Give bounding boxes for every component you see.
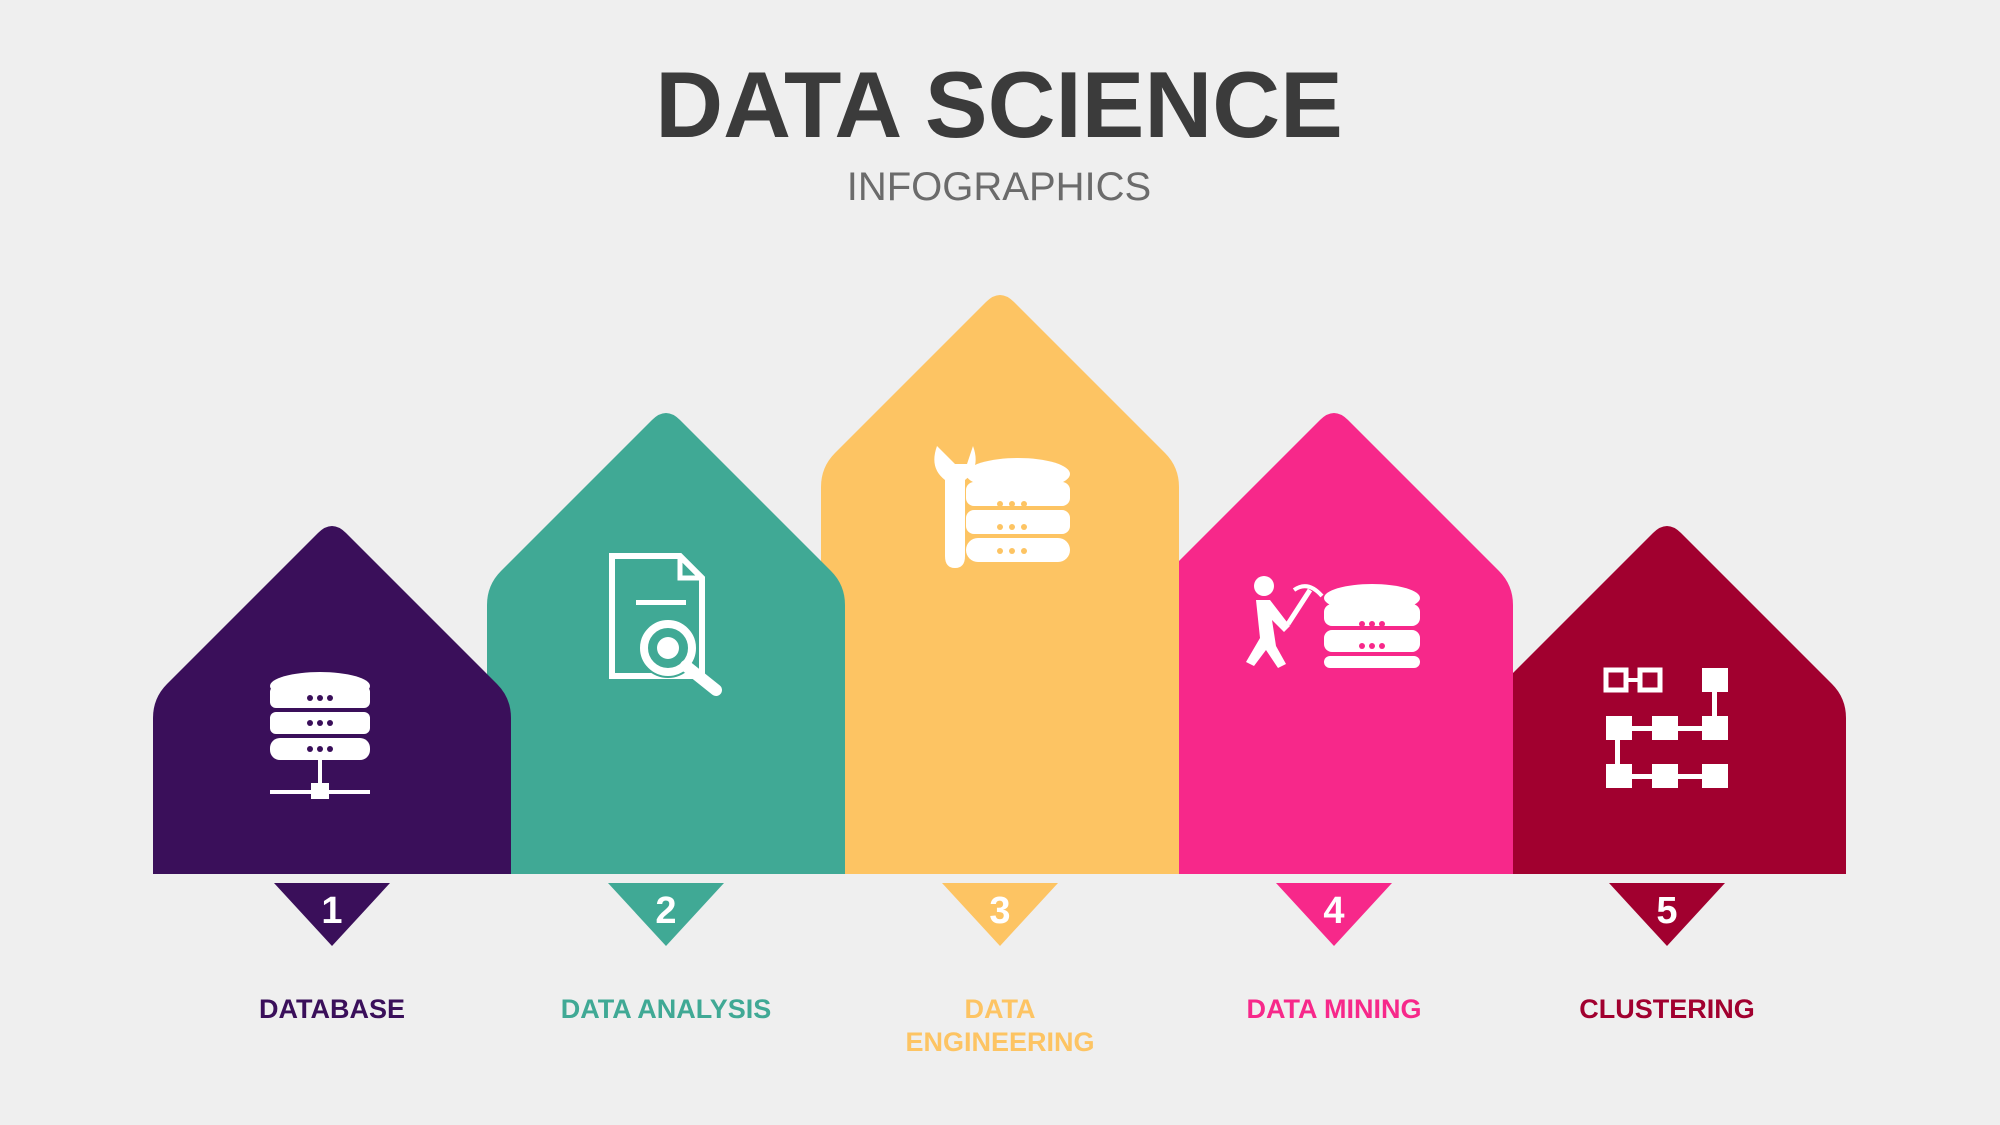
icon: miner database <box>1246 576 1420 668</box>
marker 4: 4 <box>1323 890 1345 932</box>
panel 1: database <box>153 526 511 874</box>
marker 2: 2 <box>655 890 677 932</box>
subtitle: INFOGRAPHICS <box>847 165 1151 209</box>
panel 5: clustering <box>1488 526 1846 874</box>
label 3: ENGINEERING <box>905 1027 1095 1057</box>
title: DATA SCIENCE <box>655 52 1343 157</box>
icon: clustering <box>1606 668 1728 788</box>
icon: wrench database <box>934 446 1070 568</box>
marker 3: 3 <box>989 890 1011 932</box>
label 2: DATA ANALYSIS <box>561 994 771 1024</box>
panel 4: data mining <box>1155 413 1513 874</box>
label 5: CLUSTERING <box>1579 994 1755 1024</box>
marker 1 <box>274 883 390 946</box>
label 3: DATA <box>965 994 1035 1024</box>
marker 5 <box>1609 883 1725 946</box>
marker 2 <box>608 883 724 946</box>
label 4: DATA MINING <box>1247 994 1421 1024</box>
panel 3: data engineering <box>821 295 1179 874</box>
marker 3 <box>942 883 1058 946</box>
label 1: DATABASE <box>259 994 405 1024</box>
panel 2: data analysis <box>487 413 845 874</box>
icon: document search <box>612 556 716 690</box>
marker 5: 5 <box>1656 890 1678 932</box>
icon: database network <box>270 672 370 799</box>
marker 1: 1 <box>321 890 343 932</box>
marker 4 <box>1276 883 1392 946</box>
